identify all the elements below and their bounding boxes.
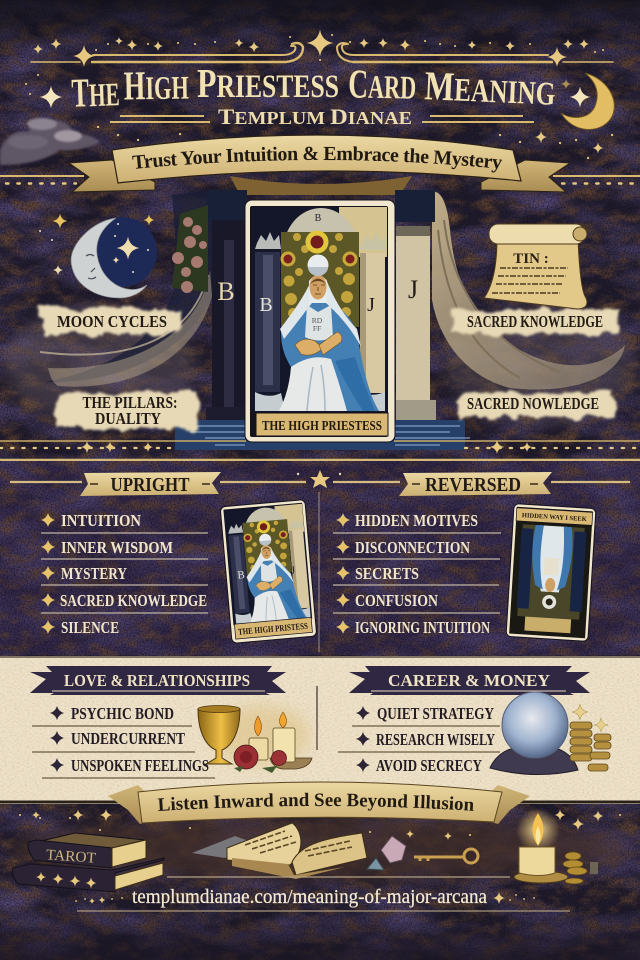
label: the pillars duality: THE PILLARS:: [82, 393, 178, 412]
banner: trust your intuition: Trust Your Intuition & Embrace the Mystery: [132, 146, 502, 172]
heading: upright: UPRIGHT: [110, 474, 190, 496]
label: sacred nowledge: SACRED NOWLEDGE: [467, 394, 599, 413]
icon: open book: [192, 823, 367, 879]
heading: love and relationships: LOVE & RELATIONSHIPS: [64, 671, 250, 690]
icon: hanging roses: [172, 205, 208, 293]
list: career: RESEARCH WISELY: [376, 730, 495, 749]
list: reversed keywords: IGNORING INTUITION: [355, 618, 491, 637]
list: upright keywords: SILENCE: [61, 618, 119, 637]
water below the card: [175, 420, 470, 450]
list: upright keywords: SACRED KNOWLEDGE: [60, 591, 207, 610]
label: sacred knowledge: [452, 309, 620, 334]
curtain left: [40, 190, 212, 387]
pillars behind central card: B: [217, 277, 235, 306]
card: upright small: J: [290, 565, 296, 577]
card: the high priestess: B: [315, 213, 322, 224]
label: sacred nowledge: [456, 392, 614, 417]
icon: moon with face: [40, 214, 157, 298]
star divider: [298, 470, 340, 652]
divider between columns: [316, 686, 318, 750]
list: upright keywords: INTUITION: [61, 511, 142, 530]
panel: upright and reversed: [0, 461, 640, 655]
subtitle: Templum Dianae: TEMPLUM DIANAE: [218, 104, 412, 129]
icon: crystals: [367, 836, 406, 870]
icon: tarot books: [13, 833, 164, 892]
panel: bottom tabletop: [0, 782, 640, 960]
card: the high priestess: RD: [312, 316, 323, 325]
banner: listen inward: [108, 782, 530, 824]
icon: key: [414, 849, 478, 863]
icon: tarot books: TAROT: [45, 847, 96, 867]
label: moon cycles: [42, 309, 180, 334]
list: love: PSYCHIC BOND: [71, 704, 174, 723]
curtain right: [432, 192, 625, 390]
icon: parchment scroll: TIN :: [513, 251, 549, 267]
subtitle: Templum Dianae: [110, 104, 534, 129]
title: CARD: [348, 60, 417, 108]
list: upright keywords: MYSTERY: [61, 564, 127, 583]
list: love: UNDERCURRENT: [71, 729, 186, 748]
list: career: AVOID SECRECY: [376, 756, 482, 775]
title: THE: [71, 68, 120, 116]
title: MEANING: [424, 62, 557, 114]
icon: candle and coins: [514, 808, 598, 884]
panel: love and career: [0, 656, 640, 804]
pillars behind central card: [206, 176, 436, 422]
banner: trust your intuition: [0, 134, 640, 192]
icon: crystal ball with coins: [490, 692, 611, 775]
list: reversed keywords: [333, 511, 501, 637]
list: upright keywords: [41, 511, 208, 637]
pillars behind central card: J: [408, 275, 418, 304]
list: reversed keywords: DISCONNECTION: [355, 538, 471, 557]
label: the pillars duality: [58, 393, 198, 429]
card: the high priestess: B: [259, 294, 273, 316]
title: PRIESTESS: [197, 60, 339, 106]
card: reversed small: HIDDEN WAY I SEEK: [522, 512, 587, 523]
list: reversed keywords: HIDDEN MOTIVES: [355, 511, 478, 530]
heading: career and money: [349, 666, 590, 695]
card: the high priestess: [245, 200, 395, 442]
title: HIGH: [123, 61, 189, 109]
list: reversed keywords: CONFUSION: [355, 591, 439, 610]
title: [71, 60, 557, 116]
label: moon cycles: MOON CYCLES: [57, 312, 167, 331]
banner: listen inward: Listen Inward and See Beyond Illusion: [158, 792, 474, 811]
heading: reversed: [333, 472, 630, 496]
heading: upright: [10, 472, 306, 496]
list: love: UNSPOKEN FEELINGS: [71, 756, 209, 775]
list: reversed keywords: SECRETS: [355, 564, 419, 583]
header ornament with stars and scrollwork: [26, 30, 613, 94]
heading: reversed: REVERSED: [425, 474, 521, 496]
card: reversed small: [506, 504, 596, 641]
divider band with stars: [0, 440, 640, 460]
icon: crescent moon: [40, 73, 614, 158]
footer lines and url: templumdianae.com/meaning-of-major-arcana: [132, 886, 487, 908]
heading: love and relationships: [30, 666, 286, 695]
label: the pillars duality: DUALITY: [95, 409, 161, 428]
icon: cloud: [0, 118, 100, 165]
card: the high priestess: J: [367, 294, 375, 316]
icon: chalice candles and roses: [198, 705, 312, 773]
card: the high priestess: FF: [313, 324, 321, 333]
footer lines and url: [76, 877, 570, 911]
card: upright small: [220, 500, 317, 643]
card: upright small: THE HIGH PRISTESS: [238, 621, 308, 637]
card: the high priestess: THE HIGH PRIESTESS: [262, 419, 382, 434]
list: career: [338, 704, 500, 775]
bottom vignette: [0, 905, 640, 960]
heading: career and money: CAREER & MONEY: [388, 671, 550, 690]
list: career: QUIET STRATEGY: [377, 704, 494, 723]
card: upright small: B: [237, 569, 245, 582]
list: love: [32, 704, 215, 778]
list: upright keywords: INNER WISDOM: [61, 538, 173, 557]
icon: parchment scroll: [484, 224, 587, 309]
